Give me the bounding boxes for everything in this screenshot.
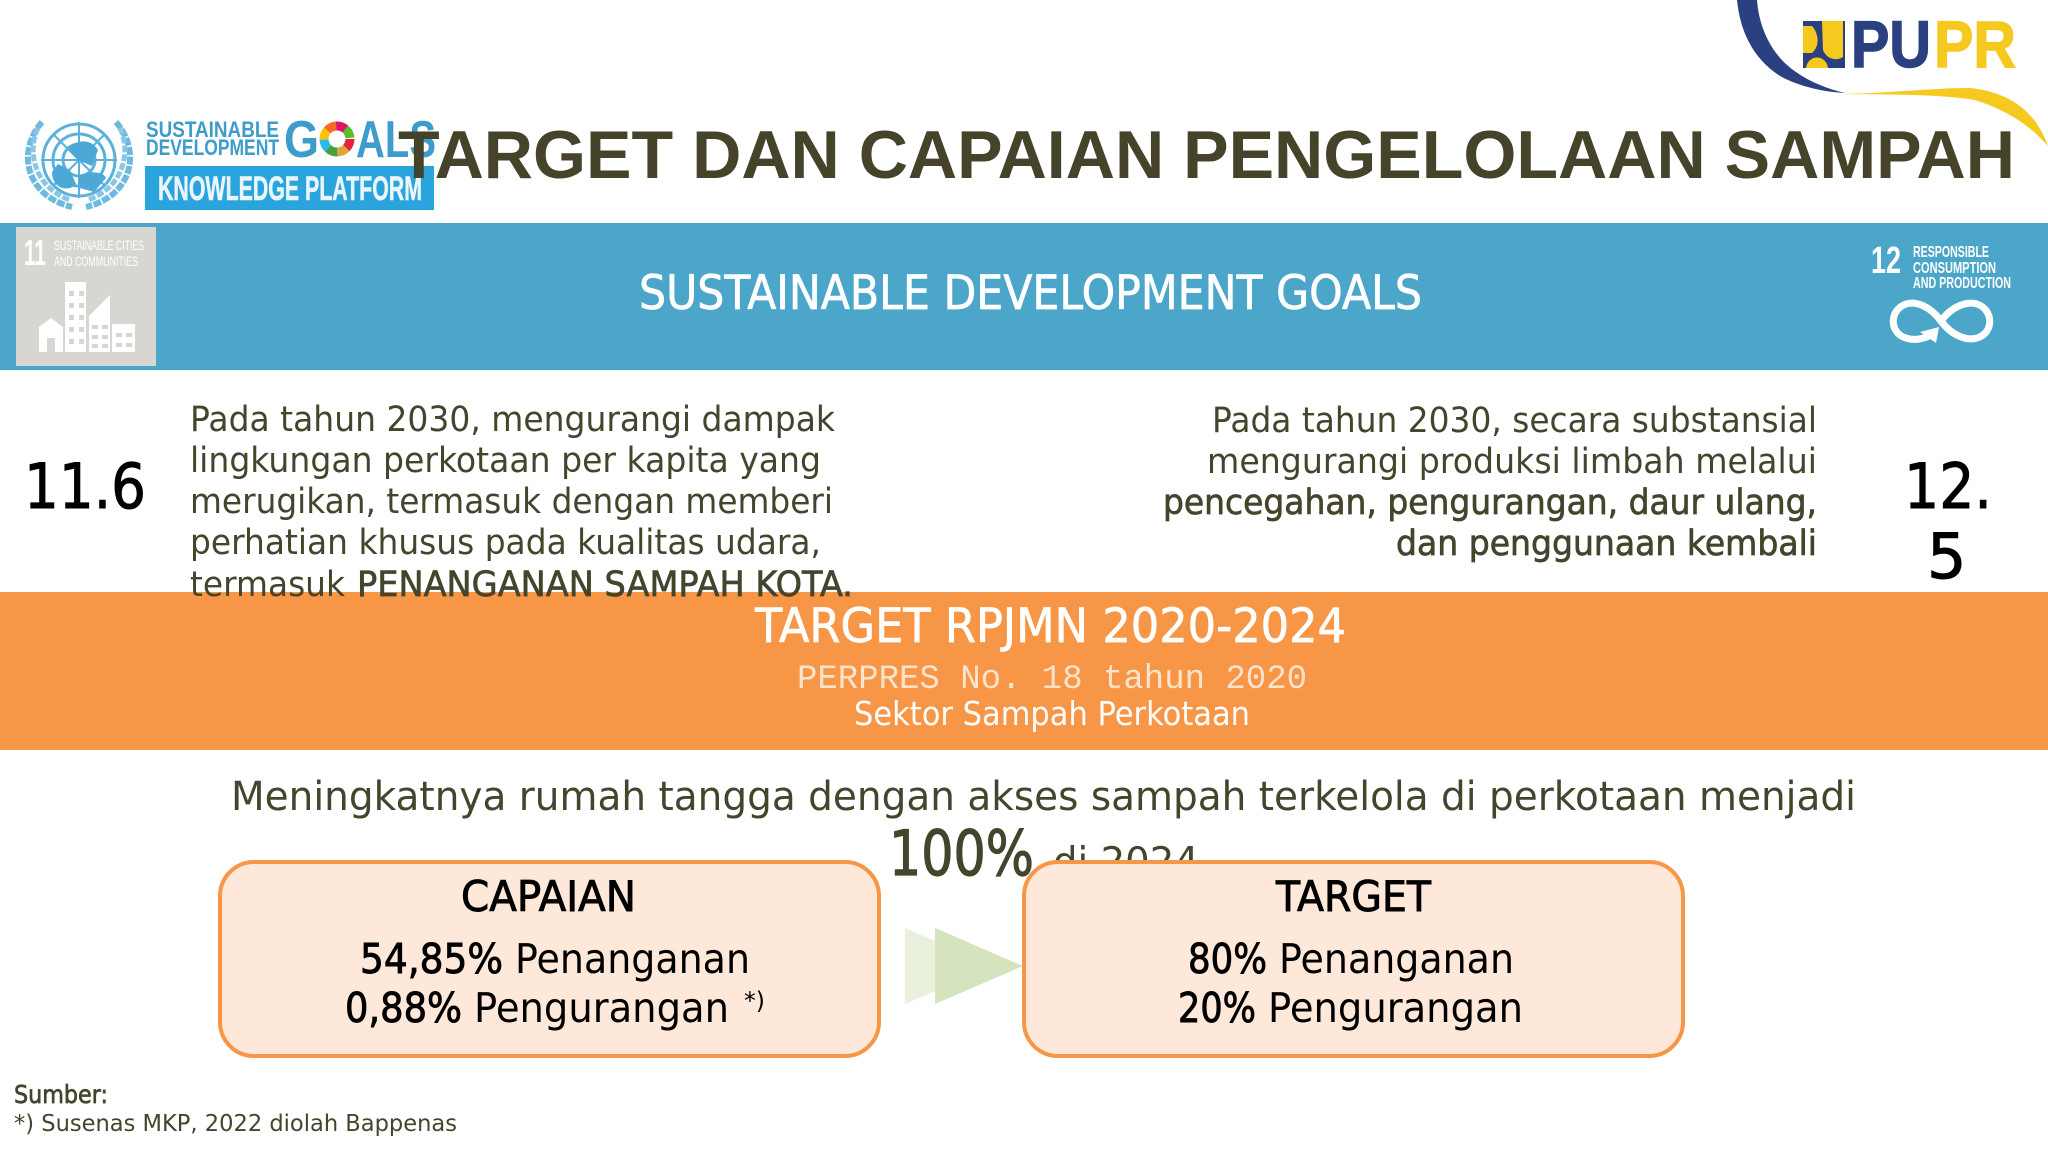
logo text: sustainable development: [146, 117, 279, 160]
callout: 100 percent in 2024: 100%: [889, 817, 1034, 890]
icon: PUPR emblem: [1803, 21, 1845, 68]
icon: SDG 12 label: CONSUMPTION: [1913, 260, 1996, 277]
label: target 12.5 number: [1904, 450, 1992, 593]
callout: 100 percent in 2024: [889, 817, 1199, 890]
logo text: goals: ALS: [356, 111, 436, 169]
source note: [14, 1080, 457, 1137]
logo: PUPR with swoosh: [1737, 0, 2048, 146]
logo banner: knowledge platform: [145, 166, 434, 210]
panel: target: [1024, 862, 1683, 1056]
logo text: PUPR: PU: [1851, 7, 1931, 81]
text: target figures: Pengurangan: [1268, 984, 1523, 1032]
text block: target 12.5 description: [1163, 401, 1817, 564]
icon: SDG 11 tile: [16, 227, 156, 366]
callout: 100 percent in 2024: di 2024: [1053, 840, 1199, 885]
text block: target 11.6 description: [190, 400, 853, 605]
text block: target 11.6 description: Pada tahun 2030, mengurangi dampak: [190, 400, 836, 440]
text block: target 11.6 description: perhatian khusus pada kualitas udara,: [190, 523, 821, 563]
text: target figures: 80%: [1188, 935, 1267, 983]
label: target 12.5 number: 12.: [1904, 450, 1992, 523]
text block: target 11.6 description: lingkungan perkotaan per kapita yang: [190, 441, 821, 481]
icon: SDG 12 label: [1871, 240, 2011, 343]
icon: SDG 11 tile: AND COMMUNITIES: [54, 253, 138, 269]
text: target figures: 20%: [1178, 984, 1256, 1032]
icon: UN emblem logo: [28, 122, 130, 207]
logo text: sustainable development: DEVELOPMENT: [146, 135, 279, 160]
arrow: progress from capaian to target: [905, 928, 1023, 1004]
text: capaian figures: Penanganan: [515, 935, 750, 983]
swoosh: blue: [1737, 0, 1845, 93]
heading: capaian: CAPAIAN: [461, 872, 636, 921]
logo text: goals: [284, 111, 436, 169]
swoosh: yellow: [1840, 88, 2048, 146]
icon: SDG 12 label: 12: [1871, 240, 1901, 282]
text block: target 12.5 description: pencegahan, pengurangan, daur ulang,: [1163, 483, 1817, 523]
panel: sustainable development goals band: [0, 223, 2048, 370]
icon: SDG 11 tile: 11: [24, 232, 46, 273]
text block: target 11.6 description: termasuk: [190, 565, 346, 605]
text block: target 12.5 description: Pada tahun 2030, secara substansial: [1212, 401, 1817, 441]
logo text: goals: G: [284, 111, 319, 169]
text block: target 12.5 description: dan penggunaan kembali: [1396, 524, 1817, 564]
label: target 12.5 number: 5: [1927, 520, 1966, 593]
heading: target RPJMN: TARGET RPJMN 2020-2024: [754, 599, 1346, 654]
heading: sustainable development goals: SUSTAINABLE DEVELOPMENT GOALS: [639, 266, 1422, 321]
subheading: sektor: Sektor Sampah Perkotaan: [854, 694, 1250, 733]
logo text: PUPR: [1851, 7, 2016, 81]
panel: capaian: [220, 862, 879, 1056]
text: capaian figures: 0,88%: [345, 984, 462, 1032]
icon: SDG colour wheel: [324, 126, 350, 152]
text: target figures: Penanganan: [1279, 935, 1514, 983]
icon: SDG 12 label: RESPONSIBLE: [1913, 244, 1989, 261]
text block: target 12.5 description: mengurangi produksi limbah melalui: [1207, 442, 1817, 482]
logo banner: knowledge platform: KNOWLEDGE PLATFORM: [158, 170, 422, 208]
heading: target: TARGET: [1275, 872, 1431, 921]
logo text: sustainable development: SUSTAINABLE: [146, 117, 279, 142]
icon: SDG 11 tile: SUSTAINABLE CITIES: [54, 237, 144, 253]
text: capaian figures: *): [744, 987, 765, 1015]
logo text: PUPR: PR: [1934, 7, 2016, 81]
panel: target RPJMN band: [0, 592, 2048, 750]
text: target figures: [1178, 935, 1523, 1032]
text: capaian figures: Pengurangan: [474, 984, 729, 1032]
source note: Sumber:: [14, 1080, 108, 1109]
text block: target 11.6 description: merugikan, termasuk dengan memberi: [190, 482, 833, 522]
text: capaian figures: [345, 935, 765, 1032]
text block: statement: Meningkatnya rumah tangga dengan akses sampah terkelola di perkotaan menjadi: [231, 774, 1856, 820]
text block: target 11.6 description: PENANGANAN SAMPAH KOTA.: [357, 565, 853, 605]
title: TARGET DAN CAPAIAN PENGELOLAAN SAMPAH: [398, 117, 2015, 193]
label: target 11.6 number: 11.6: [24, 450, 146, 523]
text: capaian figures: 54,85%: [360, 935, 503, 983]
subheading: perpres: PERPRES No. 18 tahun 2020: [797, 661, 1307, 699]
logo: Sustainable Development Goals Knowledge Platform: [145, 111, 436, 210]
source note: *) Susenas MKP, 2022 diolah Bappenas: [14, 1111, 457, 1137]
